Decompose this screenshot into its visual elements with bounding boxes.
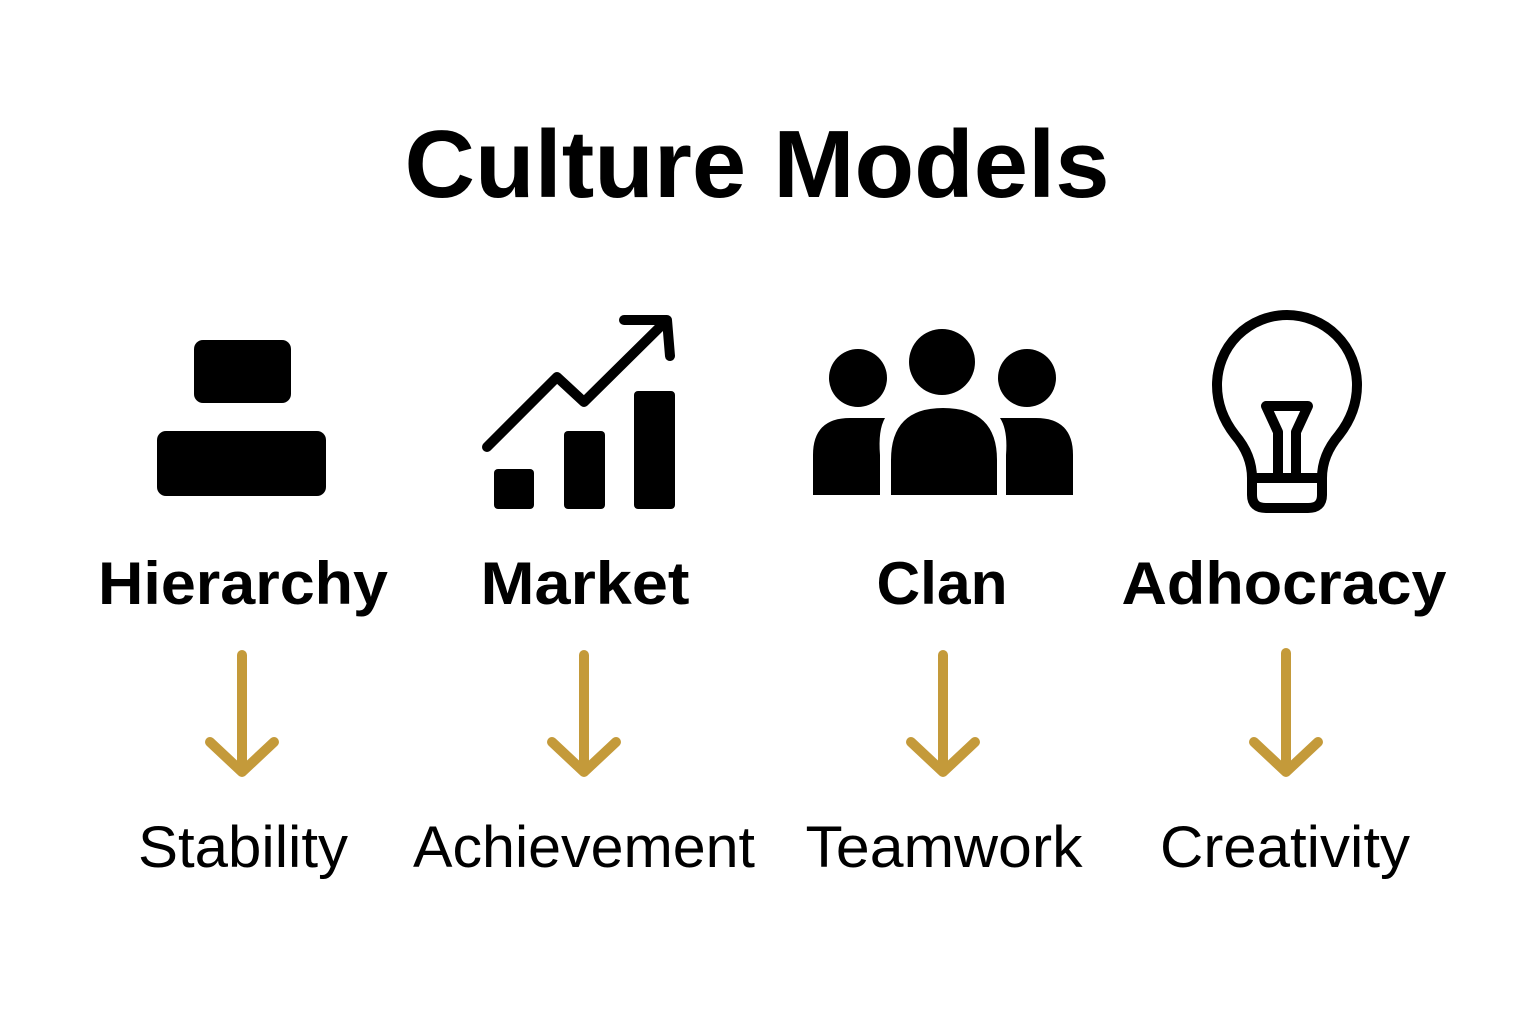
icon: clan people bbox=[813, 329, 1073, 495]
title: Culture Models bbox=[404, 111, 1110, 218]
value: Stability: Stability bbox=[138, 815, 348, 880]
value: Achievement: Achievement bbox=[413, 815, 755, 880]
icon: lightbulb bbox=[1217, 315, 1357, 508]
label: Clan: Clan bbox=[876, 550, 1008, 617]
value: Teamwork: Teamwork bbox=[806, 815, 1084, 880]
icon: market chart bbox=[487, 320, 675, 509]
label: Hierarchy: Hierarchy bbox=[98, 550, 389, 617]
value: Creativity: Creativity bbox=[1160, 815, 1410, 880]
label: Market: Market bbox=[480, 550, 690, 617]
icon: hierarchy bbox=[157, 340, 326, 496]
arrows bbox=[210, 653, 1318, 772]
label: Adhocracy: Adhocracy bbox=[1122, 550, 1447, 617]
